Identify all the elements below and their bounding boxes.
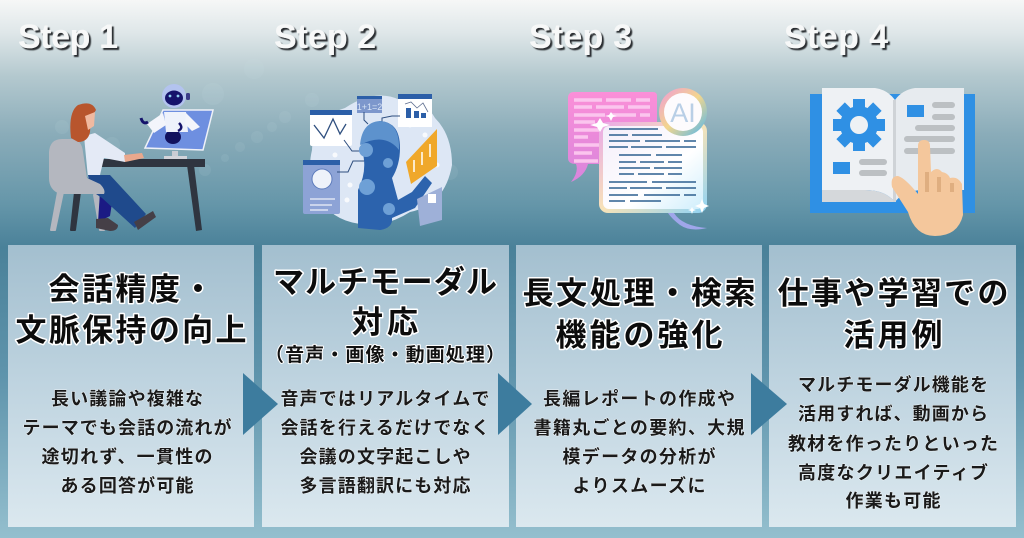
body text: step 3 [534,388,744,496]
body text: step 3: よりスムーズに [572,475,706,496]
body text: step 1: ある回答が可能 [60,475,194,496]
title: step 3: 長文処理・検索 [522,276,756,311]
title: step 4: 仕事や学習での [778,276,1008,311]
title: step 2: 対応 [352,305,418,340]
body text: step 1: 長い議論や複雑な [51,389,203,409]
title: step 3: 機能の強化 [556,318,722,353]
icon: AI text bubbles [568,88,709,229]
body text: step 2: 多言語翻訳にも対応 [300,475,470,496]
title: step 3 [522,276,756,353]
title: step 4 [778,276,1008,353]
arrow: step 3 to step 4 [751,373,787,435]
body text: step 1: テーマでも会話の流れが [22,417,232,438]
body text: step 3: 模データの分析が [562,446,716,467]
body text: step 4: マルチモーダル機能を [798,374,988,395]
step headings [18,18,888,56]
body text: step 4: 教材を作ったりといった [788,434,998,454]
background bokeh dots [55,59,458,180]
body text: step 2: 音声ではリアルタイムで [280,388,490,409]
icon: AI robot with data windows [303,94,452,230]
body text: step 4: 活用すれば、動画から [798,404,988,424]
title: step 2: マルチモーダル [273,265,497,300]
title: step 1: 会話精度・ [48,272,214,307]
body text: step 1 [22,389,232,496]
panel: step 3 card [516,245,762,527]
icon: AI text bubbles: AI [670,98,696,128]
title: step 1: 文脈保持の向上 [16,313,246,348]
heading: Step 3: Step 3 [529,18,632,56]
body text: step 2 [280,388,490,496]
title: step 2 [265,265,505,366]
title: step 1 [16,272,246,348]
body text: step 4: 高度なクリエイティブ [798,462,988,483]
title: step 2: （音声・画像・動画処理） [265,344,505,366]
panel: step 4 card [769,245,1016,527]
arrow: step 2 to step 3 [498,373,532,435]
body text: step 1: 途切れず、一貫性の [42,447,212,467]
icon: open manual book with pointing hand [810,88,975,236]
body text: step 4 [788,374,998,511]
body text: step 2: 会話を行えるだけでなく [280,418,490,438]
icon: woman chatting with robot on monitor [49,84,213,231]
icon: AI robot with data windows: 1+1=2 [357,102,382,112]
arrow: step 1 to step 2 [243,373,278,435]
heading: Step 2: Step 2 [274,18,376,56]
body text: step 3: 長編レポートの作成や [543,388,735,409]
body text: step 2: 会議の文字起こしや [300,447,470,467]
body text: step 3: 書籍丸ごとの要約、大規 [534,417,744,438]
heading: Step 4: Step 4 [784,18,888,56]
panel: step 2 card [262,245,509,527]
heading: Step 1: Step 1 [18,18,118,56]
title: step 4: 活用例 [844,318,942,353]
body text: step 4: 作業も可能 [846,491,940,511]
panel: step 1 card [8,245,254,527]
